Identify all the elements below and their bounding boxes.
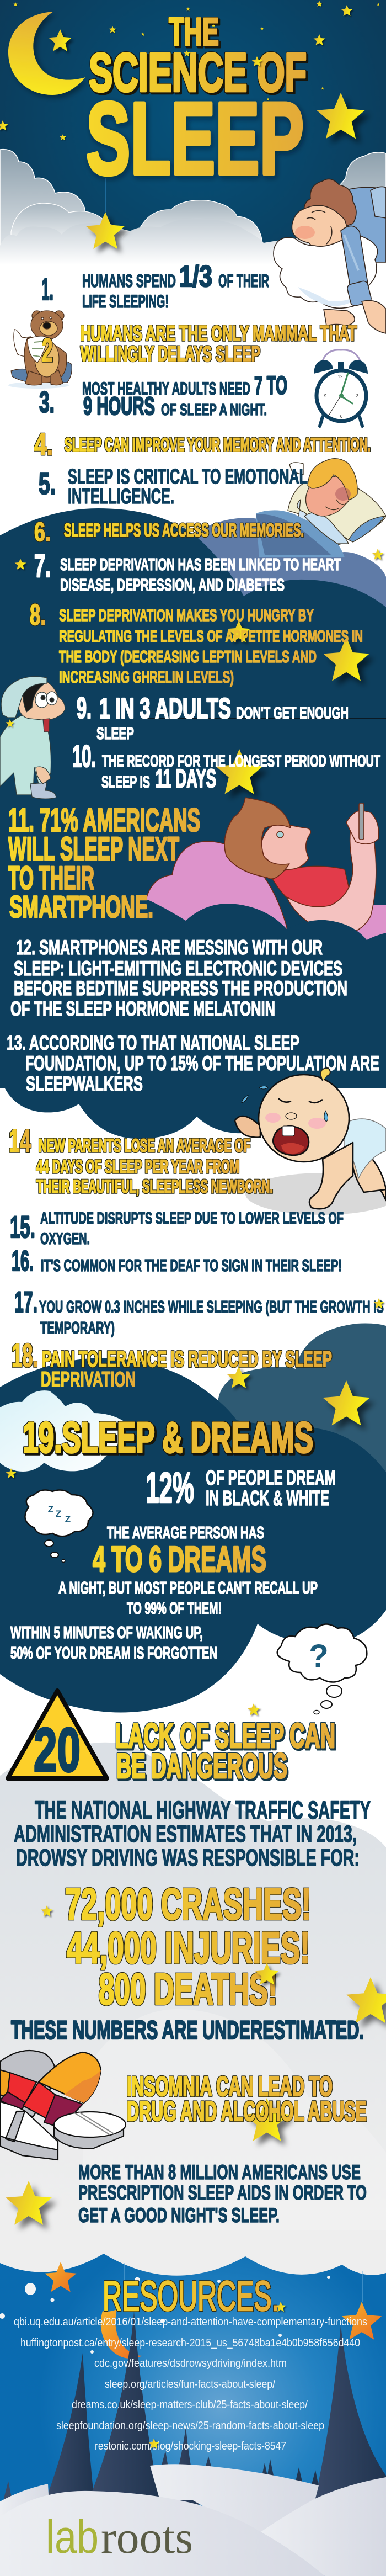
11 days statistic: 11 DAYS [156,764,216,793]
icon: alarm clock: 6 [340,414,343,419]
white cloud behind section heading [0,1390,125,1472]
pine trees [3,2311,386,2506]
fact number 18: 18. [12,1337,38,1374]
resource links [14,2316,367,2452]
dream count block: THE AVERAGE PERSON HAS [107,1523,264,1542]
star at right edge [372,549,383,560]
small star near man [6,719,14,727]
dream count block [58,1523,318,1618]
one third statistic: 1/3 [179,260,212,293]
fact 5: INTELLIGENCE. [68,485,174,508]
illustration: crying baby [235,1068,386,1215]
hanging star string [105,178,106,212]
fact 8 [30,598,363,687]
fact 1 [41,260,269,311]
title line: THE: THE [169,10,219,54]
star at left of sleep aids [6,2181,52,2225]
fact 12: OF THE SLEEP HORMONE MELATONIN [10,997,275,1020]
fact 2 [42,322,357,369]
star behind insomnia text [244,2098,290,2141]
dream count block: TO 99% OF THEM! [127,1598,222,1618]
fact number 10: 10. [72,739,96,773]
icon: thought cloud with question mark [277,1624,367,1714]
fact 12 [10,936,347,1020]
fact 5 [39,465,308,508]
sleep aids text: GET A GOOD NIGHT'S SLEEP. [78,2204,280,2227]
footer hanging strings [124,2263,363,2302]
fact number 6: 6. [34,518,51,547]
star behind fact 10 [216,749,263,794]
icon: alarm clock: 3 [356,394,359,399]
fact 2: WILLINGLY DELAYS SLEEP [81,342,260,366]
fact 11 [8,802,200,924]
icon: crescent moon [8,12,85,95]
hanging star [86,212,125,249]
warning triangle with number 20: 20 [34,1715,81,1784]
illustration: boy sleeping in bed [256,459,386,557]
fact number 5: 5. [39,466,56,501]
fact 3 text: MOST HEALTHY ADULTS NEED [82,379,250,399]
labroots logo: lab [46,2511,99,2563]
illustration: man sleeping on cloud [274,179,386,333]
fact 7: DISEASE, DEPRESSION, AND DIABETES [60,575,285,594]
fact 18: DEPRIVATION [41,1368,136,1391]
back teal cloud lobe [218,1324,386,1490]
fact number 17: 17. [14,1286,37,1319]
fact number 9: 9. [77,692,92,725]
fact 11 headline: 11. 71% AMERICANS [8,802,200,838]
fact 13 [7,1032,379,1095]
navy scalloped cloud holding facts 12-13 [0,900,386,1139]
fact 3: 7 TO [254,371,287,400]
sky stars [0,1,380,140]
fact 11: SMARTPHONE. [9,889,153,924]
forgotten dream text: 50% OF YOUR DREAM IS FORGOTTEN [10,1643,217,1663]
illustration: exhausted man in pajamas [0,677,65,799]
fact 11: TO THEIR [8,860,94,896]
fact 15 [10,1209,344,1248]
fact 1: LIFE SLEEPING! [82,291,169,311]
resource links: cdc.gov/features/dsdrowsydriving/index.htm [94,2357,287,2370]
warning triangle with number 20 [8,1691,107,1784]
footer snow dots [0,2276,330,2354]
icon: thought cloud with ZZZ [25,1490,93,1562]
illustration: woman in bed with smartphone [145,798,386,944]
resource links: dreams.co.uk/sleep-matters-club/25-facts-about-sleep/ [72,2399,308,2411]
main navy cloud background [0,508,386,938]
fact number 14: 14 [9,1123,31,1159]
fact number 8: 8. [30,598,46,631]
fact number 15: 15. [10,1209,35,1244]
star beside fact 7 [15,559,26,570]
fact 4 [34,427,371,461]
fact 15: OXYGEN. [40,1230,90,1248]
clock numerals: 12 [338,374,343,379]
main navy dream cloud [0,1358,386,1712]
small star over links [148,2439,159,2448]
statistic: 4 to 6 dreams: 4 TO 6 DREAMS [93,1539,266,1579]
statistic: 12 percent: 12% [146,1463,194,1512]
statistic: 12 percent [146,1463,336,1512]
header clouds [0,150,386,287]
fact 10: SLEEP IS [101,772,150,792]
blue cloud lobes behind facts 6-8 [187,518,386,613]
header night sky [0,0,386,259]
fact 1 text: HUMANS SPEND [82,271,176,291]
icon: alarm clock: 9 [324,394,327,399]
fact 9 [77,692,349,743]
fact 18 [12,1337,332,1391]
fact 3: 9 HOURS [83,392,155,420]
fact number 3: 3. [39,386,55,419]
divider line [143,718,386,719]
star beside crash statistic [41,1905,52,1916]
fact number 2: 2 [42,332,53,369]
fact 10 [72,739,380,793]
snowy hills [0,2464,386,2576]
icon: thought cloud with ZZZ: Z [65,1514,71,1525]
1 in 3 adults statistic: 1 IN 3 ADULTS [99,693,231,725]
title [86,10,307,196]
grey lower panel [0,1743,386,2276]
fact 14: 44 DAYS OF SLEEP PER YEAR FROM [36,1156,239,1177]
fact number 16: 16. [12,1245,34,1277]
fact 14 [9,1123,273,1197]
icon: thought cloud with ZZZ: Z [48,1504,53,1515]
hanging orange stars [45,2262,382,2340]
fact 7 [34,548,341,594]
fact 8: INCREASING GHRELIN LEVELS) [59,667,234,687]
resources heading: RESOURCES. [103,2273,279,2320]
fact 1: OF THEIR [218,271,269,291]
insomnia heading [127,2071,367,2127]
stars around statistics [255,1963,386,2023]
resource links: sleepfoundation.org/sleep-news/25-random-facts-about-sleep [56,2420,324,2432]
fact 3 [39,371,287,420]
small star at growth line [373,1298,384,1308]
stars behind fact 8 [227,620,369,681]
icon: thought cloud with question mark: ? [309,1638,329,1674]
fact 9: SLEEP [96,724,134,743]
footer blue sky [0,2252,386,2576]
fact 3: OF SLEEP A NIGHT. [161,401,267,419]
forgotten dream text [10,1623,217,1663]
fact 17: TEMPORARY) [40,1318,115,1337]
fact 11: WILL SLEEP NEXT [8,831,179,867]
resource links: sleep.org/articles/fun-facts-about-sleep/ [105,2378,275,2391]
icon: thought cloud with ZZZ: Z [56,1509,61,1519]
fact 1: 1. [41,272,53,306]
small star above warning [248,1703,260,1715]
stars in dream cloud [6,1366,370,1478]
resource links: restonic.com/blog/shocking-sleep-facts-8547 [95,2440,286,2452]
forgotten dream text: WITHIN 5 MINUTES OF WAKING UP, [10,1623,203,1642]
hanging orange moon [101,2309,142,2359]
small star by resources heading [275,2302,286,2312]
fact number 7: 7. [34,548,51,584]
small stars over title [184,24,262,66]
fact 6 [34,518,304,547]
labroots logo: roots [101,2512,193,2563]
icon: alarm clock [314,350,368,426]
fact 17 [14,1286,384,1337]
section 20 heading [115,1717,335,1786]
fact 13: SLEEPWALKERS [26,1072,143,1095]
statistic: deaths: 800 DEATHS! [99,1964,277,2014]
sleep aids text [78,2161,367,2227]
fact number 4: 4. [34,427,53,461]
subtle lighter lobes in grey panel [83,2009,386,2230]
labroots logo [46,2511,193,2563]
fact 16 [12,1245,342,1277]
illustration: pills [0,2051,126,2160]
fact 14 text: NEW PARENTS LOSE AN AVERAGE OF [39,1135,250,1156]
illustration: sleepy bear with pillows [8,311,72,389]
drowsy driving text [14,1796,371,1871]
